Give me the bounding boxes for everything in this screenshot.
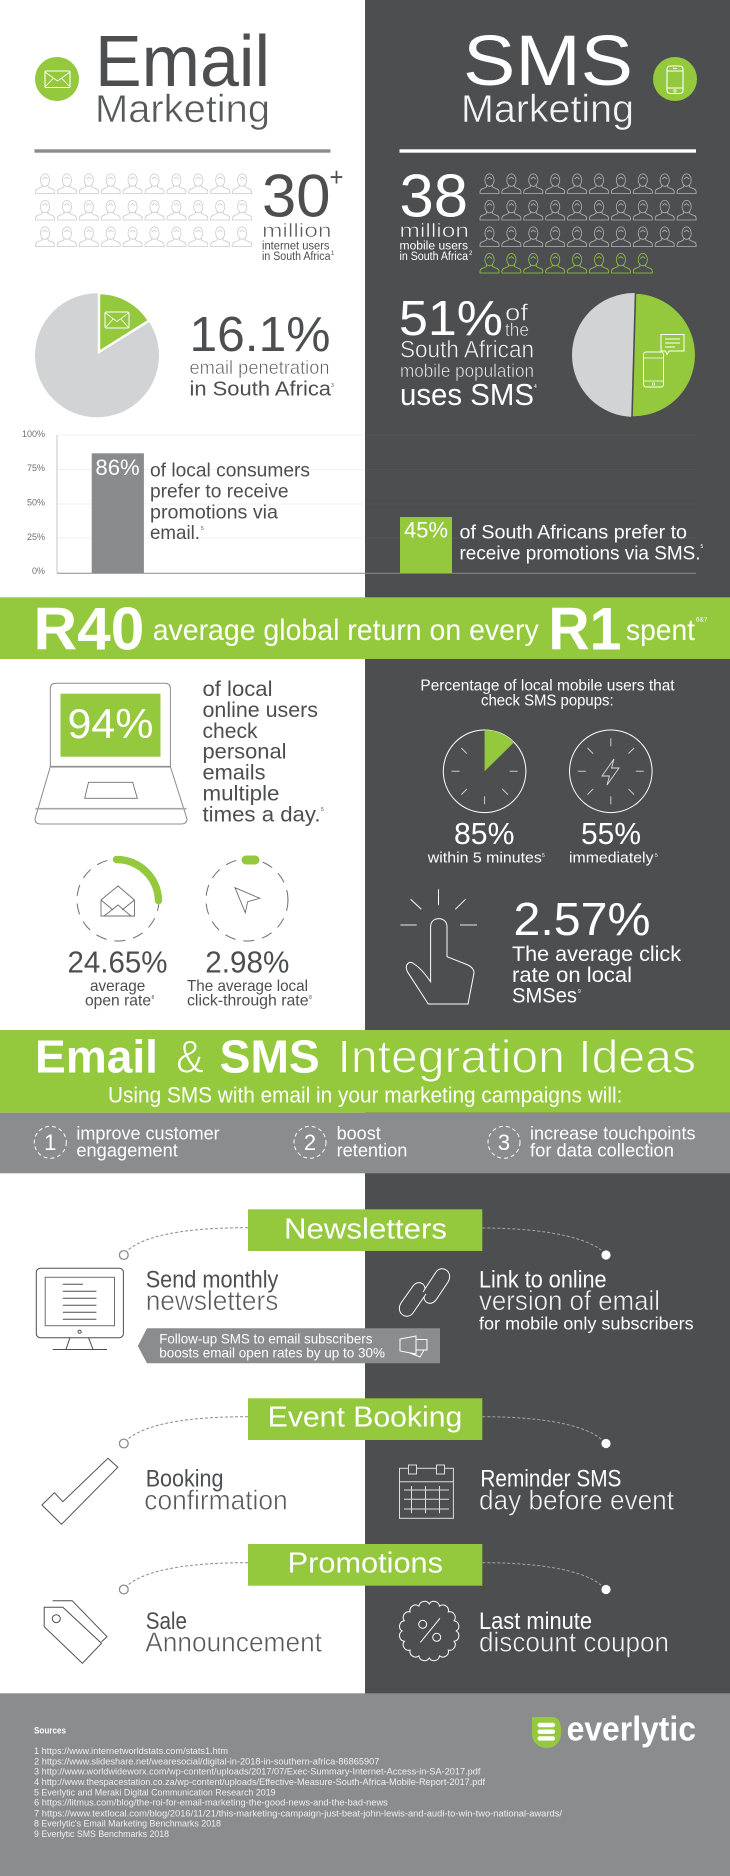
stat: 38 million mobile users: 2 — [469, 251, 473, 257]
pie chart: sms use — [572, 293, 696, 417]
benefit 3: for data collection — [530, 1141, 674, 1161]
stat: 30+ million internet users: million — [262, 220, 332, 242]
text: local online users: 5 — [321, 807, 324, 813]
chart axis labels: 100% — [22, 429, 45, 439]
pie chart: email penetration — [35, 293, 159, 417]
text: sale announcement — [145, 1608, 322, 1658]
stat: click-through rate: 8 — [309, 995, 312, 1001]
panel: email column background — [0, 0, 365, 1876]
title: Email & SMS Integration Ideas: Integration Ideas — [338, 1031, 696, 1083]
stat: 55% immediately — [569, 816, 658, 867]
icon: discount coupon badge — [400, 1601, 459, 1661]
text: sms preference: 5 — [700, 544, 704, 550]
text: last minute coupon: Last minute — [479, 1608, 592, 1635]
text: reminder sms: Reminder SMS — [480, 1466, 621, 1493]
pictogram: mobile users — [480, 174, 696, 273]
text: sms preference: of South Africans prefer to — [460, 521, 687, 543]
text: send monthly newsletters — [146, 1267, 278, 1316]
gauge: click-through rate — [206, 859, 288, 941]
stat: 30+ million internet users — [262, 162, 344, 263]
text: source list — [34, 1746, 562, 1840]
text: source list: 1 https://www.internetworldstats.com/stats1.htm — [34, 1746, 228, 1757]
subtitle: Using SMS with email in your marketing campaigns will: — [108, 1083, 622, 1108]
stat: 16.1% email penetration: 3 — [331, 383, 334, 389]
bar: 45% sms — [400, 517, 452, 573]
title word: Marketing: Marketing — [95, 88, 270, 131]
stat: open rate: 24.65% — [68, 945, 168, 980]
stat: 38 million mobile users — [400, 163, 473, 263]
text: reminder sms: day before event — [479, 1484, 674, 1515]
text: sale announcement: Announcement — [145, 1627, 322, 1658]
stat: 38 million mobile users: mobile users — [400, 240, 468, 252]
icon: clock 85% within 5 minutes — [443, 730, 526, 813]
callout: follow-up sms: boosts email open rates by up to 30% — [159, 1344, 385, 1360]
heading: sms popups: Percentage of local mobile users that — [420, 678, 675, 695]
stat: open rate: open rate — [85, 993, 151, 1010]
banner: R40 return — [0, 595, 730, 662]
stat: 55% immediately: immediately — [569, 851, 654, 867]
text: local online users: of local — [202, 678, 272, 701]
bar: 86% email — [92, 453, 144, 573]
stat: 51% uses SMS: 4 — [534, 384, 537, 390]
section: promotions — [119, 1544, 611, 1594]
text: link to online version: for mobile only subscribers — [479, 1313, 694, 1333]
icon: check mark — [42, 1458, 118, 1524]
text: source list: 6 https://litmus.com/blog/the-roi-for-email-marketing-the-good-news-and-the-bad-news — [34, 1798, 388, 1809]
text: local online users: emails — [202, 761, 266, 784]
stat: 2.57% click rate: The average click — [512, 943, 682, 966]
benefit 1 — [34, 1123, 220, 1161]
gauge: open rate — [77, 859, 159, 941]
icon: phone circle — [653, 57, 697, 101]
benefit 3: increase touchpoints — [530, 1123, 696, 1143]
heading: sources: Sources — [34, 1725, 66, 1736]
title: Email & SMS Integration Ideas: SMS — [220, 1031, 320, 1083]
bar: 45% sms: 45% — [404, 517, 448, 542]
text: local online users — [202, 678, 324, 826]
text: email preference: email. — [150, 522, 200, 544]
icon: price tag — [44, 1601, 107, 1663]
icon: clock 55% immediately — [570, 730, 652, 813]
text: booking confirmation: confirmation — [144, 1484, 288, 1515]
text: email preference: 5 — [201, 526, 204, 532]
stat: 16.1% email penetration: 16.1% — [190, 308, 330, 362]
stat: click-through rate: click-through rate — [187, 993, 309, 1010]
heading: sms marketing — [461, 22, 697, 131]
title word: Marketing: Marketing — [461, 88, 634, 131]
section: event booking — [119, 1398, 611, 1448]
icon: email circle — [35, 57, 79, 101]
benefit 1: engagement — [76, 1141, 178, 1161]
text: local online users: personal — [202, 741, 286, 764]
stat: 38 million mobile users: in South Africa — [400, 251, 469, 263]
text: source list: 9 Everlytic SMS Benchmarks 2018 — [34, 1829, 169, 1840]
chart axis labels: 25% — [27, 532, 45, 542]
text: source list: 3 http://www.worldwideworx.com/wp-content/uploads/2017/07/Exec-Summary-Internet-Access-in-SA-2017.pdf — [34, 1767, 481, 1778]
stat: 2.57% click rate: rate on local — [512, 964, 632, 987]
stat: 30+ million internet users: + — [330, 162, 344, 192]
stat: open rate: 8 — [152, 995, 154, 1001]
section: promotions: Promotions — [288, 1548, 443, 1580]
text: booking confirmation: Booking — [146, 1466, 224, 1493]
icon: chain link — [399, 1269, 450, 1316]
icon: monitor — [36, 1268, 123, 1350]
stat: 55% immediately: 5 — [655, 853, 658, 859]
stat: 85% within 5 minutes: 85% — [454, 816, 514, 851]
text: email preference: promotions via — [150, 501, 278, 523]
text: last minute coupon — [479, 1608, 669, 1658]
section: newsletters: Newsletters — [284, 1213, 447, 1245]
stat: 51% uses SMS — [399, 292, 537, 412]
banner: integration ideas — [0, 1030, 730, 1113]
title: Email & SMS Integration Ideas: & — [176, 1031, 204, 1083]
bar: 86% email: 86% — [95, 455, 140, 480]
stat: 30+ million internet users: 30 — [262, 163, 330, 230]
stat: 51% uses SMS: uses SMS — [400, 377, 534, 412]
stat: 85% within 5 minutes: within 5 minutes — [427, 851, 542, 867]
stat: 30+ million internet users: 1 — [331, 251, 335, 257]
stat: 51% uses SMS: 51% — [399, 292, 503, 346]
icon: tapping hand — [400, 889, 477, 1004]
text: link to online version — [479, 1267, 694, 1333]
text: sms preference — [460, 521, 704, 564]
callout: follow-up sms — [138, 1328, 440, 1363]
stat: 38 million mobile users: million — [400, 220, 469, 242]
text: send monthly newsletters: Send monthly — [146, 1267, 278, 1294]
text: local online users: multiple — [202, 782, 280, 805]
text: source list: 7 https://www.textlocal.com/blog/2016/11/21/this-marketing-campaign-just-beat-john-lewis-and-audi-to-win-two-national-awards/ — [34, 1808, 562, 1819]
text: reminder sms — [479, 1466, 674, 1515]
panel: three benefits — [0, 1113, 730, 1173]
benefit 2: 2 — [304, 1130, 316, 1155]
title word: SMS: SMS — [463, 22, 633, 101]
stat: 16.1% email penetration: in South Africa — [190, 379, 332, 401]
stat: 38 million mobile users: 38 — [400, 163, 468, 230]
stat: 51% uses SMS: mobile population — [400, 361, 534, 381]
heading: email marketing — [35, 22, 270, 131]
benefit 3: 3 — [498, 1130, 510, 1155]
callout: follow-up sms: Follow-up SMS to email subscribers — [159, 1330, 372, 1346]
banner: R40 return: R40 — [34, 595, 144, 662]
heading: sms popups: check SMS popups: — [481, 693, 614, 710]
text: local online users: times a day. — [202, 803, 320, 826]
text: source list: 4 http://www.thespacestation.co.za/wp-content/uploads/Effective-Measure-South-Africa-Mobile-Report-2017.pdf — [34, 1777, 485, 1788]
icon: laptop with 94% — [35, 683, 187, 824]
stat: 16.1% email penetration: email penetration — [190, 358, 330, 379]
stat: click-through rate: 2.98% — [205, 945, 289, 980]
title: Email & SMS Integration Ideas — [35, 1031, 696, 1083]
chart axis labels — [22, 429, 45, 576]
chart axis labels: 50% — [27, 498, 45, 508]
banner: R40 return: spent — [626, 614, 696, 647]
stat: 51% uses SMS: South African — [400, 337, 534, 364]
stat: 85% within 5 minutes: 5 — [542, 853, 545, 859]
text: link to online version: Link to online — [479, 1267, 607, 1294]
text: local online users: check — [202, 720, 258, 743]
logo: everlytic: everlytic — [567, 1711, 696, 1749]
banner: R40 return: 6&7 — [696, 618, 708, 624]
text: source list: 8 Everlytic's Email Marketing Benchmarks 2018 — [34, 1819, 221, 1830]
icon: calendar — [400, 1465, 453, 1518]
benefit 1: 1 — [44, 1130, 56, 1155]
banner: R40 return: average global return on every — [153, 614, 539, 647]
section: newsletters — [119, 1209, 611, 1260]
title word: Email: Email — [95, 22, 270, 102]
text: email preference: of local consumers — [150, 460, 310, 482]
text: source list: 5 Everlytic and Meraki Digital Communication Research 2019 — [34, 1787, 276, 1798]
stat: 2.57% click rate: 9 — [578, 989, 581, 995]
stat: 30+ million internet users: internet users — [262, 240, 330, 252]
text: source list: 2 https://www.slideshare.net/wearesocial/digital-in-2018-in-southern-africa-86865907 — [34, 1756, 379, 1767]
banner: R40 return: R1 — [548, 595, 621, 662]
benefit 3 — [488, 1123, 696, 1161]
text: link to online version: version of email — [479, 1285, 660, 1316]
stat: click-through rate: The average local — [187, 978, 308, 995]
stat: open rate — [68, 945, 168, 1010]
text: last minute coupon: discount coupon — [479, 1627, 669, 1658]
bar chart: channel preference — [22, 429, 704, 576]
pictogram: internet users — [36, 174, 252, 246]
stat: click-through rate — [187, 945, 312, 1010]
stat: 30+ million internet users: in South Africa — [262, 251, 331, 263]
icon: laptop with 94%: 94% — [68, 700, 154, 747]
stat: 51% uses SMS: of — [505, 300, 529, 326]
benefit 2: boost — [337, 1123, 381, 1143]
stat: 2.57% click rate: SMSes — [512, 985, 577, 1008]
stat: 2.57% click rate — [512, 893, 682, 1008]
text: booking confirmation — [144, 1466, 288, 1515]
text: sale announcement: Sale — [146, 1608, 187, 1635]
title: Email & SMS Integration Ideas: Email — [35, 1031, 158, 1083]
section: event booking: Event Booking — [268, 1402, 462, 1434]
text: send monthly newsletters: newsletters — [146, 1285, 278, 1316]
stat: open rate: average — [90, 978, 145, 995]
chart axis labels: 0% — [32, 566, 45, 576]
stat: 85% within 5 minutes — [427, 816, 545, 867]
text: email preference: prefer to receive — [150, 480, 289, 502]
benefit 2 — [294, 1123, 407, 1161]
icon: megaphone — [400, 1336, 427, 1357]
text: sms preference: receive promotions via SMS. — [460, 542, 700, 564]
chart axis labels: 75% — [27, 463, 45, 473]
stat: 55% immediately: 55% — [581, 816, 641, 851]
text: local online users: online users — [202, 699, 318, 722]
text: email preference — [150, 460, 310, 544]
panel: sms column background — [365, 0, 730, 1876]
heading: sms popups — [420, 678, 675, 710]
stat: 16.1% email penetration — [190, 308, 334, 401]
panel: footer sources — [0, 1693, 730, 1876]
stat: 51% uses SMS: the — [505, 320, 529, 340]
benefit 1: improve customer — [76, 1123, 220, 1143]
benefit 2: retention — [337, 1141, 407, 1161]
stat: 2.57% click rate: 2.57% — [514, 893, 650, 945]
